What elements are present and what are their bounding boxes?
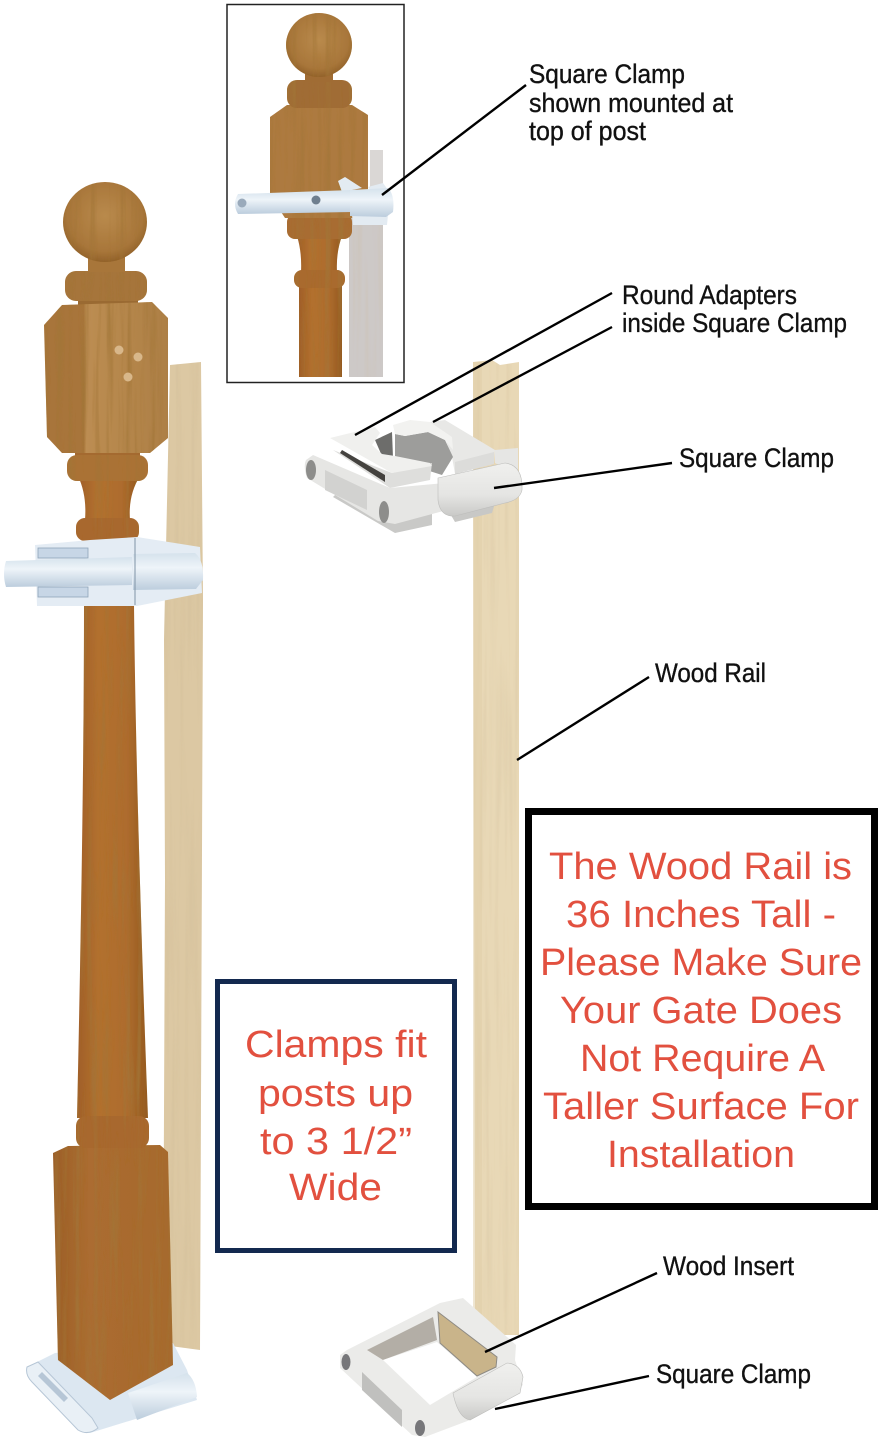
inset ball (286, 13, 352, 77)
inset clamp (235, 177, 393, 225)
inset neck under ball (305, 72, 333, 82)
inset shaft (299, 285, 342, 377)
leader: bottom square clamp (495, 1376, 649, 1409)
inset lower ring (294, 270, 345, 288)
hinge holes (342, 1354, 425, 1436)
clamp fit text: Clamps fit (245, 1024, 427, 1066)
front plate top (330, 427, 432, 473)
left post knots (114, 346, 142, 382)
wood insert (438, 1312, 497, 1376)
clamp fit text (245, 1024, 427, 1209)
label: square clamp at top of post: Square Clamp (529, 59, 685, 89)
left photo: wood post with clamps and rail (4, 182, 203, 1433)
left post collar (65, 271, 147, 301)
outer frame (340, 1298, 523, 1437)
lower bar (305, 455, 447, 524)
tab under hinge (448, 503, 495, 522)
left post square block (44, 302, 168, 453)
right plate (430, 420, 495, 474)
round adapter rim (393, 420, 453, 450)
left post clamp (4, 537, 203, 606)
warning text: 36 Inches Tall - (566, 894, 836, 936)
left post lower ring (76, 1116, 149, 1148)
inset neck (297, 236, 342, 272)
dark adapter opening (395, 432, 453, 475)
inset rail (349, 150, 383, 377)
left post shaft (77, 604, 148, 1118)
top square clamp with round adapters (305, 420, 522, 533)
inset photo: square clamp mounted at top of post (227, 4, 404, 382)
inset frame (227, 4, 404, 382)
label: square clamp: Square Clamp (679, 443, 834, 473)
leader: square clamp (494, 463, 672, 488)
label: wood rail: Wood Rail (655, 658, 766, 688)
center wood rail (473, 360, 519, 1335)
label: round adapters (622, 280, 847, 338)
hinge holes (306, 460, 389, 523)
callout: wood rail height warning (528, 812, 874, 1206)
inset collar (287, 80, 352, 108)
opening (383, 1342, 477, 1405)
inset ring (287, 214, 352, 239)
far right strip (495, 448, 518, 475)
label: wood insert: Wood Insert (663, 1251, 794, 1281)
lower flange (333, 490, 432, 533)
left wood rail (163, 362, 203, 1350)
leader: wood rail (517, 677, 649, 760)
inner hardware (375, 432, 393, 458)
front plate side (333, 450, 432, 488)
clamp fit text: to 3 1/2” (260, 1121, 412, 1163)
label: round adapters: Round Adapters (622, 280, 797, 310)
inset square block (270, 105, 368, 218)
warning text: Your Gate Does (560, 990, 842, 1032)
leaders: round adapters (355, 293, 612, 435)
back slot (367, 1317, 437, 1360)
warning text (540, 846, 862, 1176)
lower bar slot (325, 470, 367, 510)
callout: clamp fit (218, 982, 454, 1250)
hinge barrel (453, 1363, 523, 1420)
left post base block (53, 1145, 173, 1400)
front slot (362, 1372, 402, 1427)
leader: square clamp inset (382, 85, 526, 195)
warning text: Installation (607, 1134, 795, 1176)
warning text: Please Make Sure (540, 942, 862, 984)
left post ring (67, 455, 148, 481)
left post joint lower (75, 448, 140, 460)
warning text: The Wood Rail is (549, 846, 852, 888)
warning text: Not Require A (580, 1038, 826, 1080)
label: square clamp at top of post (529, 59, 733, 146)
label: round adapters: inside Square Clamp (622, 308, 847, 338)
leader: wood insert (485, 1273, 657, 1352)
bottom square clamp with wood insert (340, 1298, 523, 1437)
left post base clamp (27, 1343, 197, 1433)
left post neck under ball (88, 256, 125, 272)
label: square clamp at top of post: top of post (529, 116, 646, 146)
label: square clamp at top of post: shown mounted at (529, 88, 733, 118)
clamp fit text: Wide (289, 1167, 382, 1209)
hinge barrel (438, 463, 522, 516)
label: bottom square clamp: Square Clamp (656, 1359, 811, 1389)
left post neck (78, 476, 140, 542)
left post ball (63, 182, 147, 262)
left post joint upper (78, 292, 138, 306)
left post neck ring (76, 518, 139, 541)
front plate slot (340, 450, 385, 482)
warning text: Taller Surface For (543, 1086, 859, 1128)
clamp fit text: posts up (258, 1073, 413, 1115)
